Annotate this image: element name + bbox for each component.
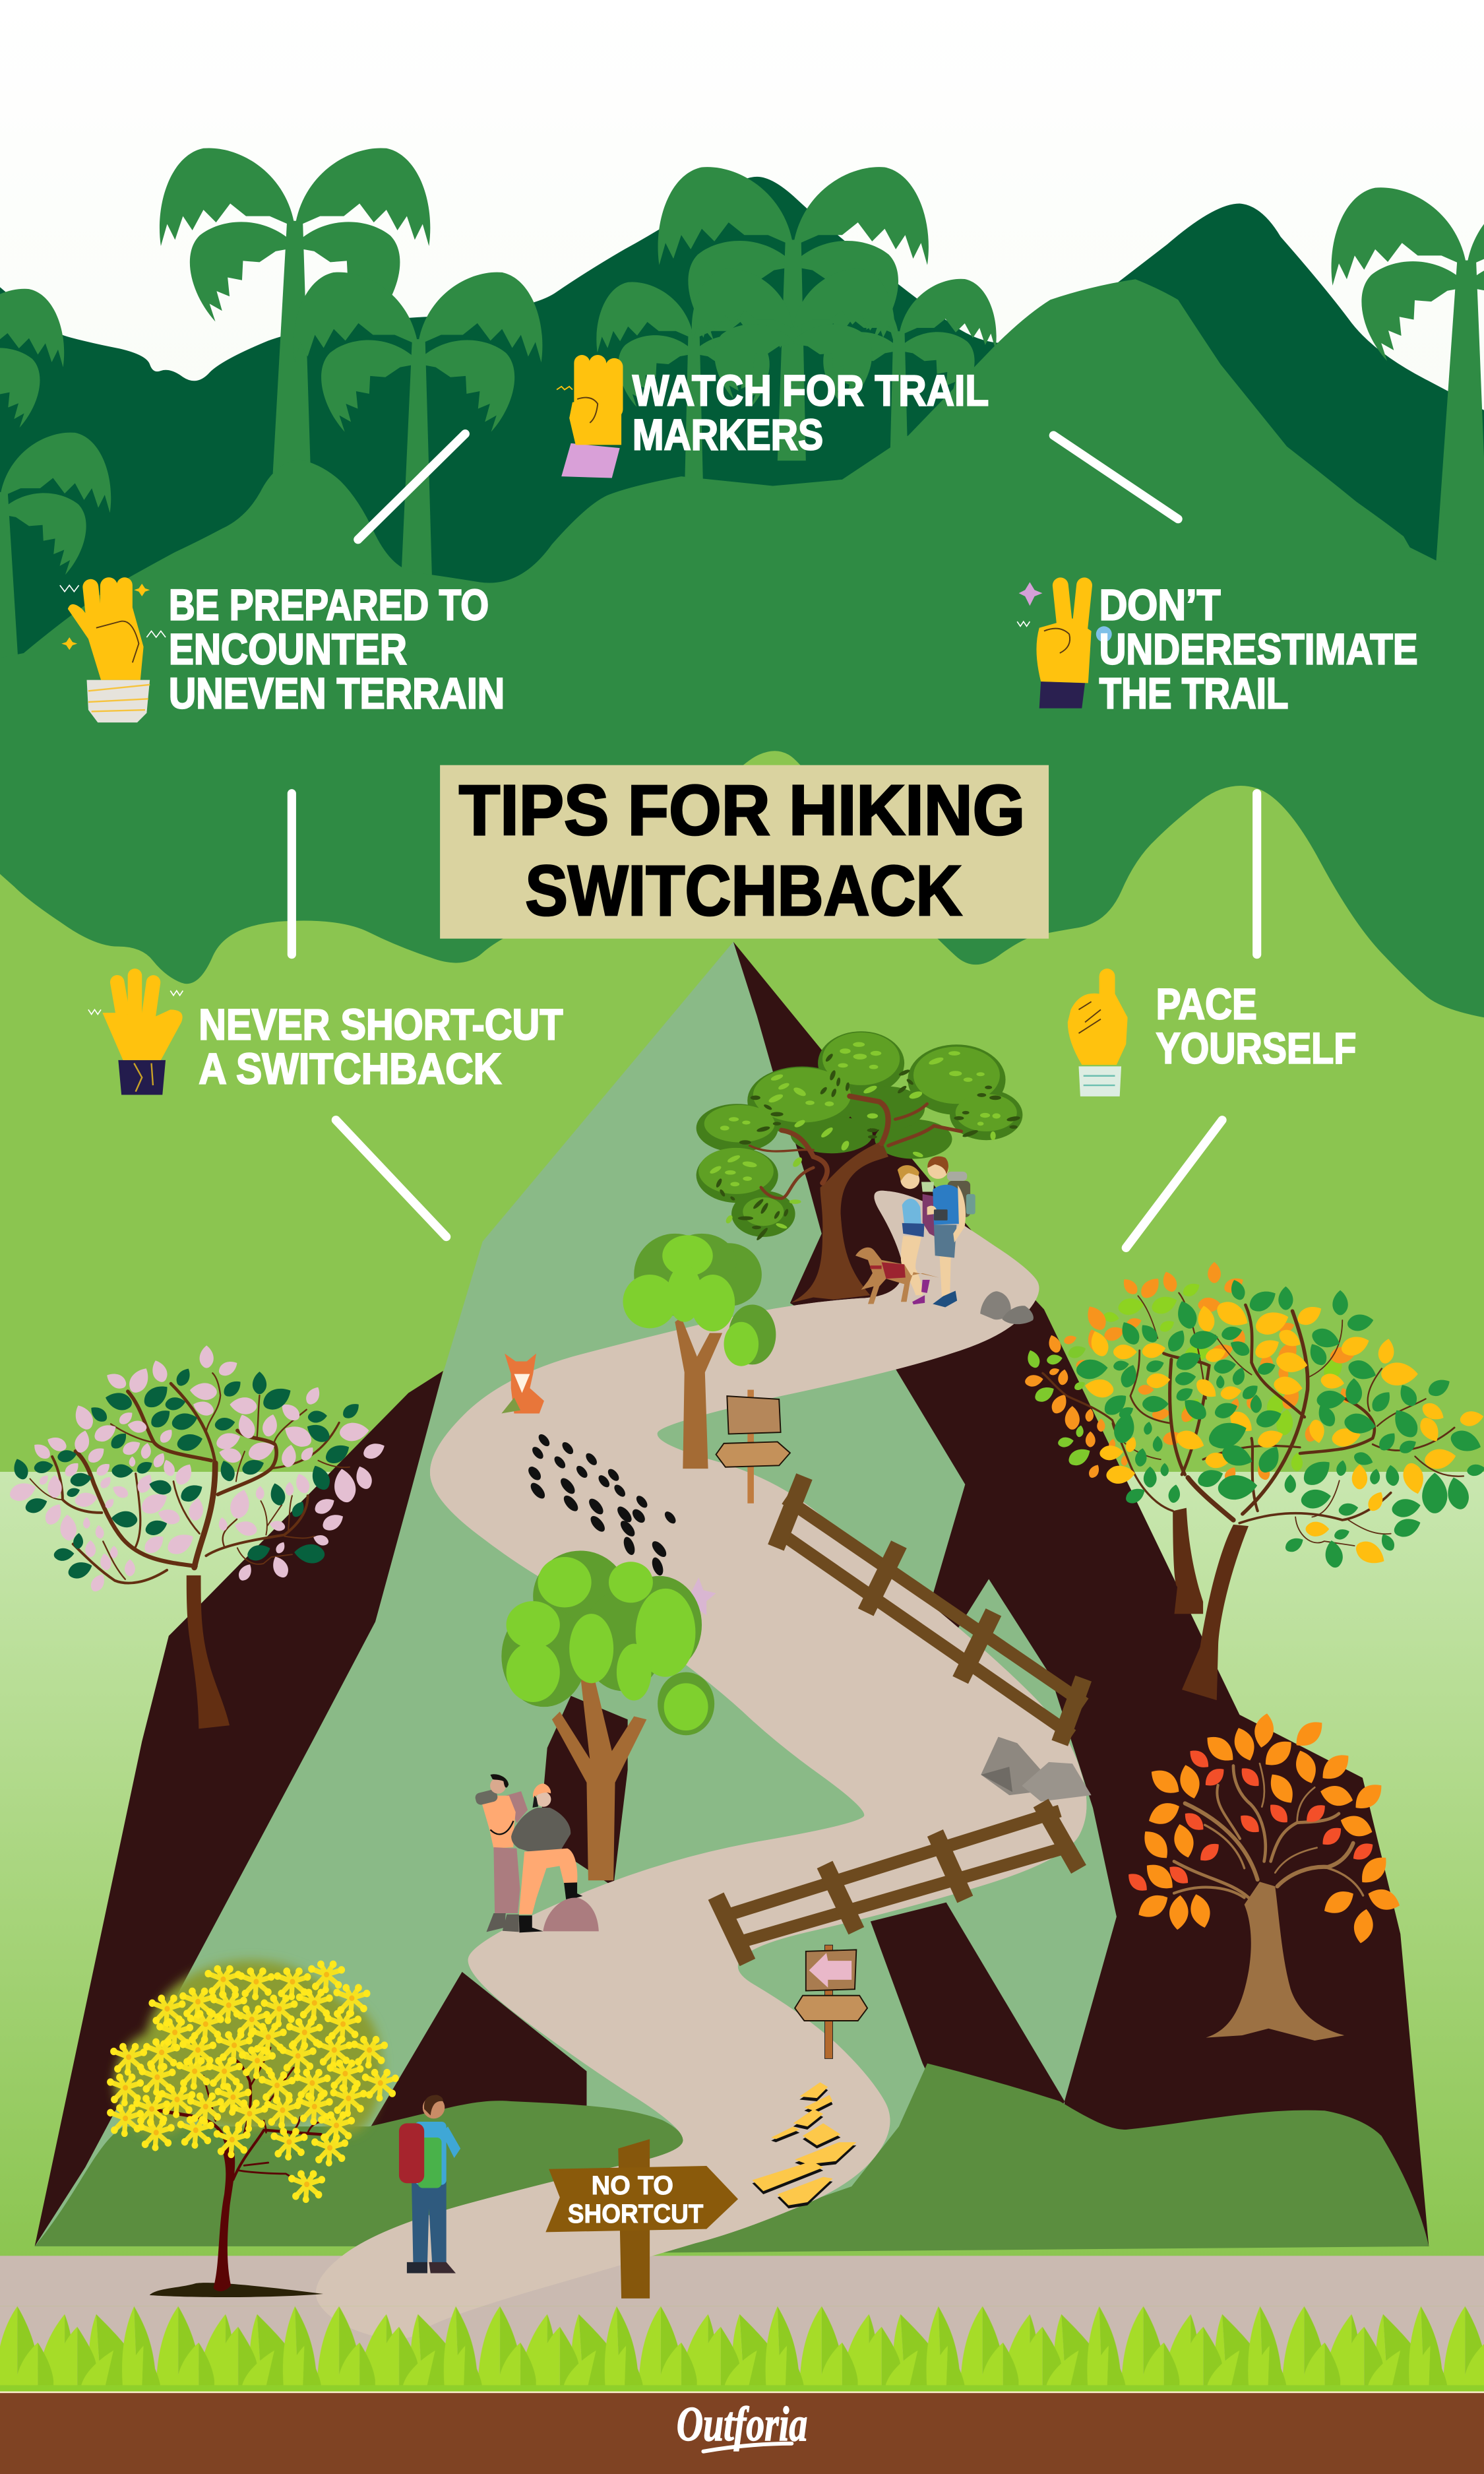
wooden sign upper — [716, 1390, 790, 1504]
upper oak tree — [696, 1031, 1022, 1303]
tip: don't underestimate the trail: DON’T — [1099, 581, 1221, 629]
tip: never short-cut a switchback: NEVER SHORT-CUT — [199, 1000, 563, 1049]
tip: be prepared to encounter uneven terrain: UNEVEN TERRAIN — [169, 669, 505, 718]
title text: SWITCHBACK — [525, 851, 962, 930]
tip: watch for trail markers — [557, 355, 989, 478]
tip: don't underestimate the trail: UNDERESTIMATE — [1099, 625, 1418, 674]
title panel — [440, 765, 1049, 939]
tip: be prepared to encounter uneven terrain — [60, 577, 505, 722]
dark green mountains — [0, 177, 1484, 694]
directional sign with pink arrow — [795, 1945, 867, 2058]
tip: don't underestimate the trail — [1017, 577, 1418, 718]
dog with saddlebag — [855, 1248, 939, 1304]
tip: be prepared to encounter uneven terrain: ENCOUNTER — [169, 625, 407, 674]
stepping stones — [753, 2082, 856, 2209]
rocks mid trail — [981, 1737, 1092, 1802]
title text: TIPS FOR HIKING — [459, 771, 1025, 850]
tip: watch for trail markers: WATCH FOR TRAIL — [633, 366, 989, 415]
yellow blossom tree — [107, 1961, 399, 2297]
sign text: SHORTCUT — [568, 2200, 703, 2229]
tip: pace yourself — [1068, 968, 1356, 1096]
grass strip — [0, 2306, 1484, 2392]
sign text — [568, 2171, 703, 2229]
pink and green tree — [7, 1345, 387, 1729]
tip: watch for trail markers: MARKERS — [633, 410, 823, 459]
connector lines — [292, 434, 1257, 1248]
road strip — [0, 2256, 1484, 2397]
autumn multicolour tree — [1024, 1262, 1484, 1700]
main wooden sign — [545, 2139, 738, 2299]
icon: one finger hand — [1068, 968, 1128, 1096]
lone hiker with red backpack — [399, 2095, 460, 2273]
dark brown rock faces — [35, 942, 1429, 2246]
tip: don't underestimate the trail: THE TRAIL — [1099, 669, 1289, 718]
icon: three finger hand — [557, 355, 623, 478]
wooden fence lower — [716, 1803, 1078, 1963]
mauve star — [683, 1577, 716, 1615]
tip: never short-cut a switchback: A SWITCHBACK — [199, 1044, 501, 1093]
rocks on upper trail — [980, 1291, 1034, 1324]
fox — [501, 1354, 544, 1413]
winding switchback trail — [316, 1191, 1086, 2339]
green foothills — [35, 2064, 1429, 2252]
icon: two finger hand — [1017, 577, 1112, 709]
footprints — [526, 1432, 678, 1577]
title text — [459, 771, 1025, 930]
top hiking couple — [898, 1157, 975, 1308]
mid green mountain range — [0, 279, 1484, 1017]
tip: pace yourself: YOURSELF — [1156, 1024, 1356, 1073]
tip: never short-cut a switchback — [88, 968, 563, 1094]
sign text: NO TO — [592, 2171, 673, 2200]
hikers on rock — [474, 1774, 599, 1932]
Outforia logo: Outforia — [677, 2397, 807, 2452]
icon: five finger hand — [88, 968, 183, 1094]
palm trees — [0, 148, 1484, 660]
third tree — [501, 1550, 714, 1880]
orange autumn tree — [1125, 1712, 1403, 2041]
icon: four finger hand — [60, 577, 166, 722]
footer band — [0, 2392, 1484, 2474]
tip: be prepared to encounter uneven terrain: BE PREPARED TO — [169, 581, 489, 629]
wooden fence upper — [776, 1476, 1085, 1743]
tip: pace yourself: PACE — [1156, 980, 1257, 1029]
second tree — [623, 1234, 776, 1469]
sage green valley — [35, 942, 1429, 2246]
